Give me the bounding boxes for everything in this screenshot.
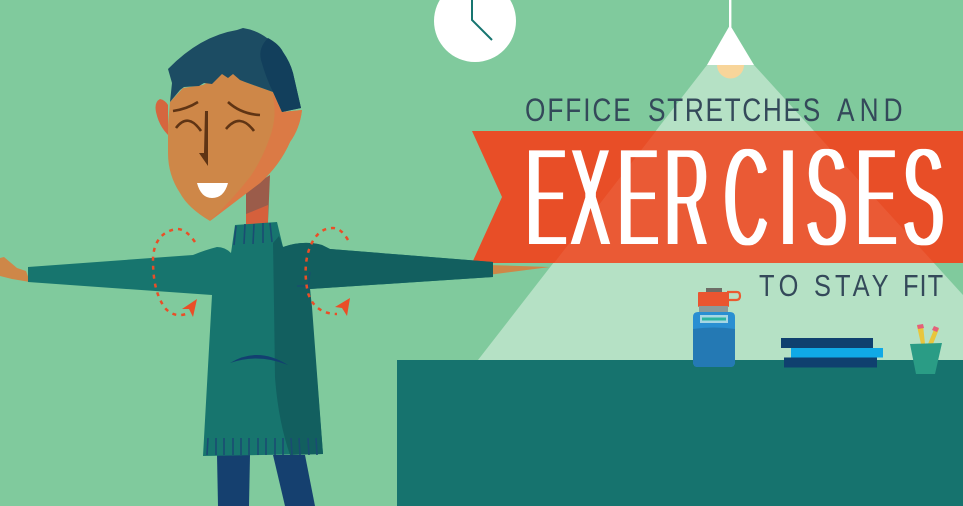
light cone: [478, 65, 963, 360]
heading: office stretches and: [525, 94, 903, 129]
hair shadow: [260, 38, 301, 112]
heading: office stretches and: STRETCHES: [648, 94, 820, 129]
icon: ceiling lamp: [707, 0, 754, 78]
heading: to stay fit: TO: [759, 269, 798, 304]
icon: stack of books: [781, 338, 883, 368]
heading: exercises: EXERCISES: [526, 119, 944, 277]
collar ribs: [234, 223, 272, 245]
mouth: [197, 183, 228, 198]
desk: [397, 360, 963, 506]
neck: [246, 175, 270, 225]
hands: [0, 257, 550, 282]
face shadow: [210, 92, 302, 221]
heading: to stay fit: STAY: [814, 269, 889, 304]
icon: pencil cup: [910, 324, 942, 374]
heading: to stay fit: [759, 269, 943, 304]
banner: [472, 131, 963, 263]
armpit crease: [297, 272, 310, 290]
stretch arrow: left shoulder: [153, 229, 197, 317]
belly crease: [230, 355, 288, 365]
stretch arrow: right shoulder: [306, 228, 350, 316]
face: [168, 74, 302, 221]
heading: to stay fit: FIT: [903, 269, 943, 304]
legs: [217, 455, 315, 506]
eyebrows and eyes: [173, 102, 260, 131]
icon: wall clock: [434, 0, 516, 62]
head: [156, 28, 302, 221]
heading: office stretches and: OFFICE: [525, 94, 631, 129]
hair: [168, 28, 301, 112]
sweater: [28, 222, 493, 456]
hem ribs: [207, 438, 317, 455]
figure: stretching man: [0, 28, 550, 506]
heading: office stretches and: AND: [837, 94, 903, 129]
nose: [199, 111, 208, 166]
ear: [156, 99, 168, 135]
icon: water bottle: [693, 288, 740, 367]
